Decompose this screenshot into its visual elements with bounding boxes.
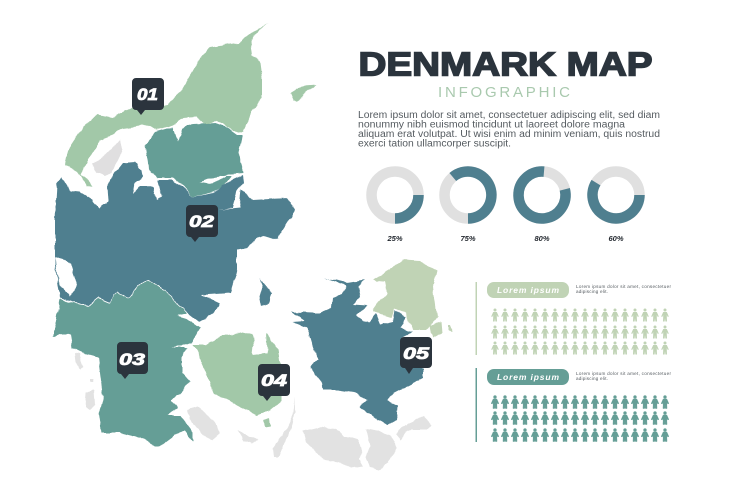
description text: exerci tation ullamcorper suscipit. [358, 138, 511, 150]
pill heading [487, 282, 569, 298]
green island: Anholt [290, 84, 317, 102]
side text: adipiscing elit. [576, 289, 608, 294]
pin 04 [258, 364, 290, 401]
pin 05: 05 [403, 344, 430, 363]
donut chart 25% [372, 172, 418, 218]
side text: adipiscing elit. [576, 376, 608, 381]
pin 04: 04 [261, 371, 288, 390]
panel: light green people [476, 282, 671, 355]
region 02: Mid Jutland north [145, 123, 243, 197]
panel: teal people [476, 368, 671, 442]
side text: Lorem ipsum dolor sit amet, consectetuer [576, 284, 671, 289]
gray island: Mors [92, 140, 122, 176]
pin 02: 02 [189, 212, 215, 231]
region 01: North Jutland [65, 23, 268, 188]
description text: aliquam erat volutpat. Ut wisi enim ad minim veniam, quis nostrud [358, 129, 660, 140]
pin 03: 03 [119, 350, 146, 369]
pin 05 [400, 337, 432, 374]
percent labels: 60% [608, 234, 624, 243]
donut chart 60% [592, 172, 640, 218]
description text: Lorem ipsum dolor sit amet, consectetuer adipiscing elit, sed diam [358, 110, 660, 121]
percent labels: 75% [460, 234, 476, 243]
pill heading [487, 369, 569, 385]
pin 02 [186, 205, 218, 242]
region 02: Mid Jutland [55, 162, 295, 322]
region 05: Zealand [292, 278, 423, 425]
capital islands [430, 322, 452, 338]
percent labels: 80% [534, 234, 550, 243]
gray surrounding islands [75, 353, 431, 470]
map of Denmark [53, 23, 452, 470]
region 05: Capital [373, 260, 437, 330]
region 04: Funen [193, 332, 282, 415]
pictogram rows [491, 396, 669, 442]
donut chart 75% [444, 172, 492, 218]
side text: Lorem ipsum dolor sit amet, consectetuer [576, 371, 671, 376]
pin 01 [132, 78, 164, 115]
title: DENMARK MAP [358, 46, 652, 82]
pill heading: Lorem ipsum [497, 285, 559, 295]
percent labels [386, 234, 624, 243]
donut chart 80% [518, 172, 566, 219]
white lagoon and fjords [55, 239, 276, 297]
side text [576, 284, 671, 294]
pin 01: 01 [137, 85, 158, 104]
side text [576, 371, 671, 381]
percent labels: 25% [386, 234, 403, 243]
small green island [262, 418, 271, 427]
region 03: South Jutland [53, 281, 200, 447]
teal island: Als [260, 277, 272, 307]
description text [358, 110, 660, 150]
pictogram rows [491, 308, 669, 354]
description text: nonummy nibh euismod tincidunt ut laoreet dolore magna [358, 120, 625, 130]
pin 03 [117, 342, 148, 379]
pill heading: Lorem ipsum [497, 372, 559, 382]
subtitle: INFOGRAPHIC [438, 84, 570, 101]
